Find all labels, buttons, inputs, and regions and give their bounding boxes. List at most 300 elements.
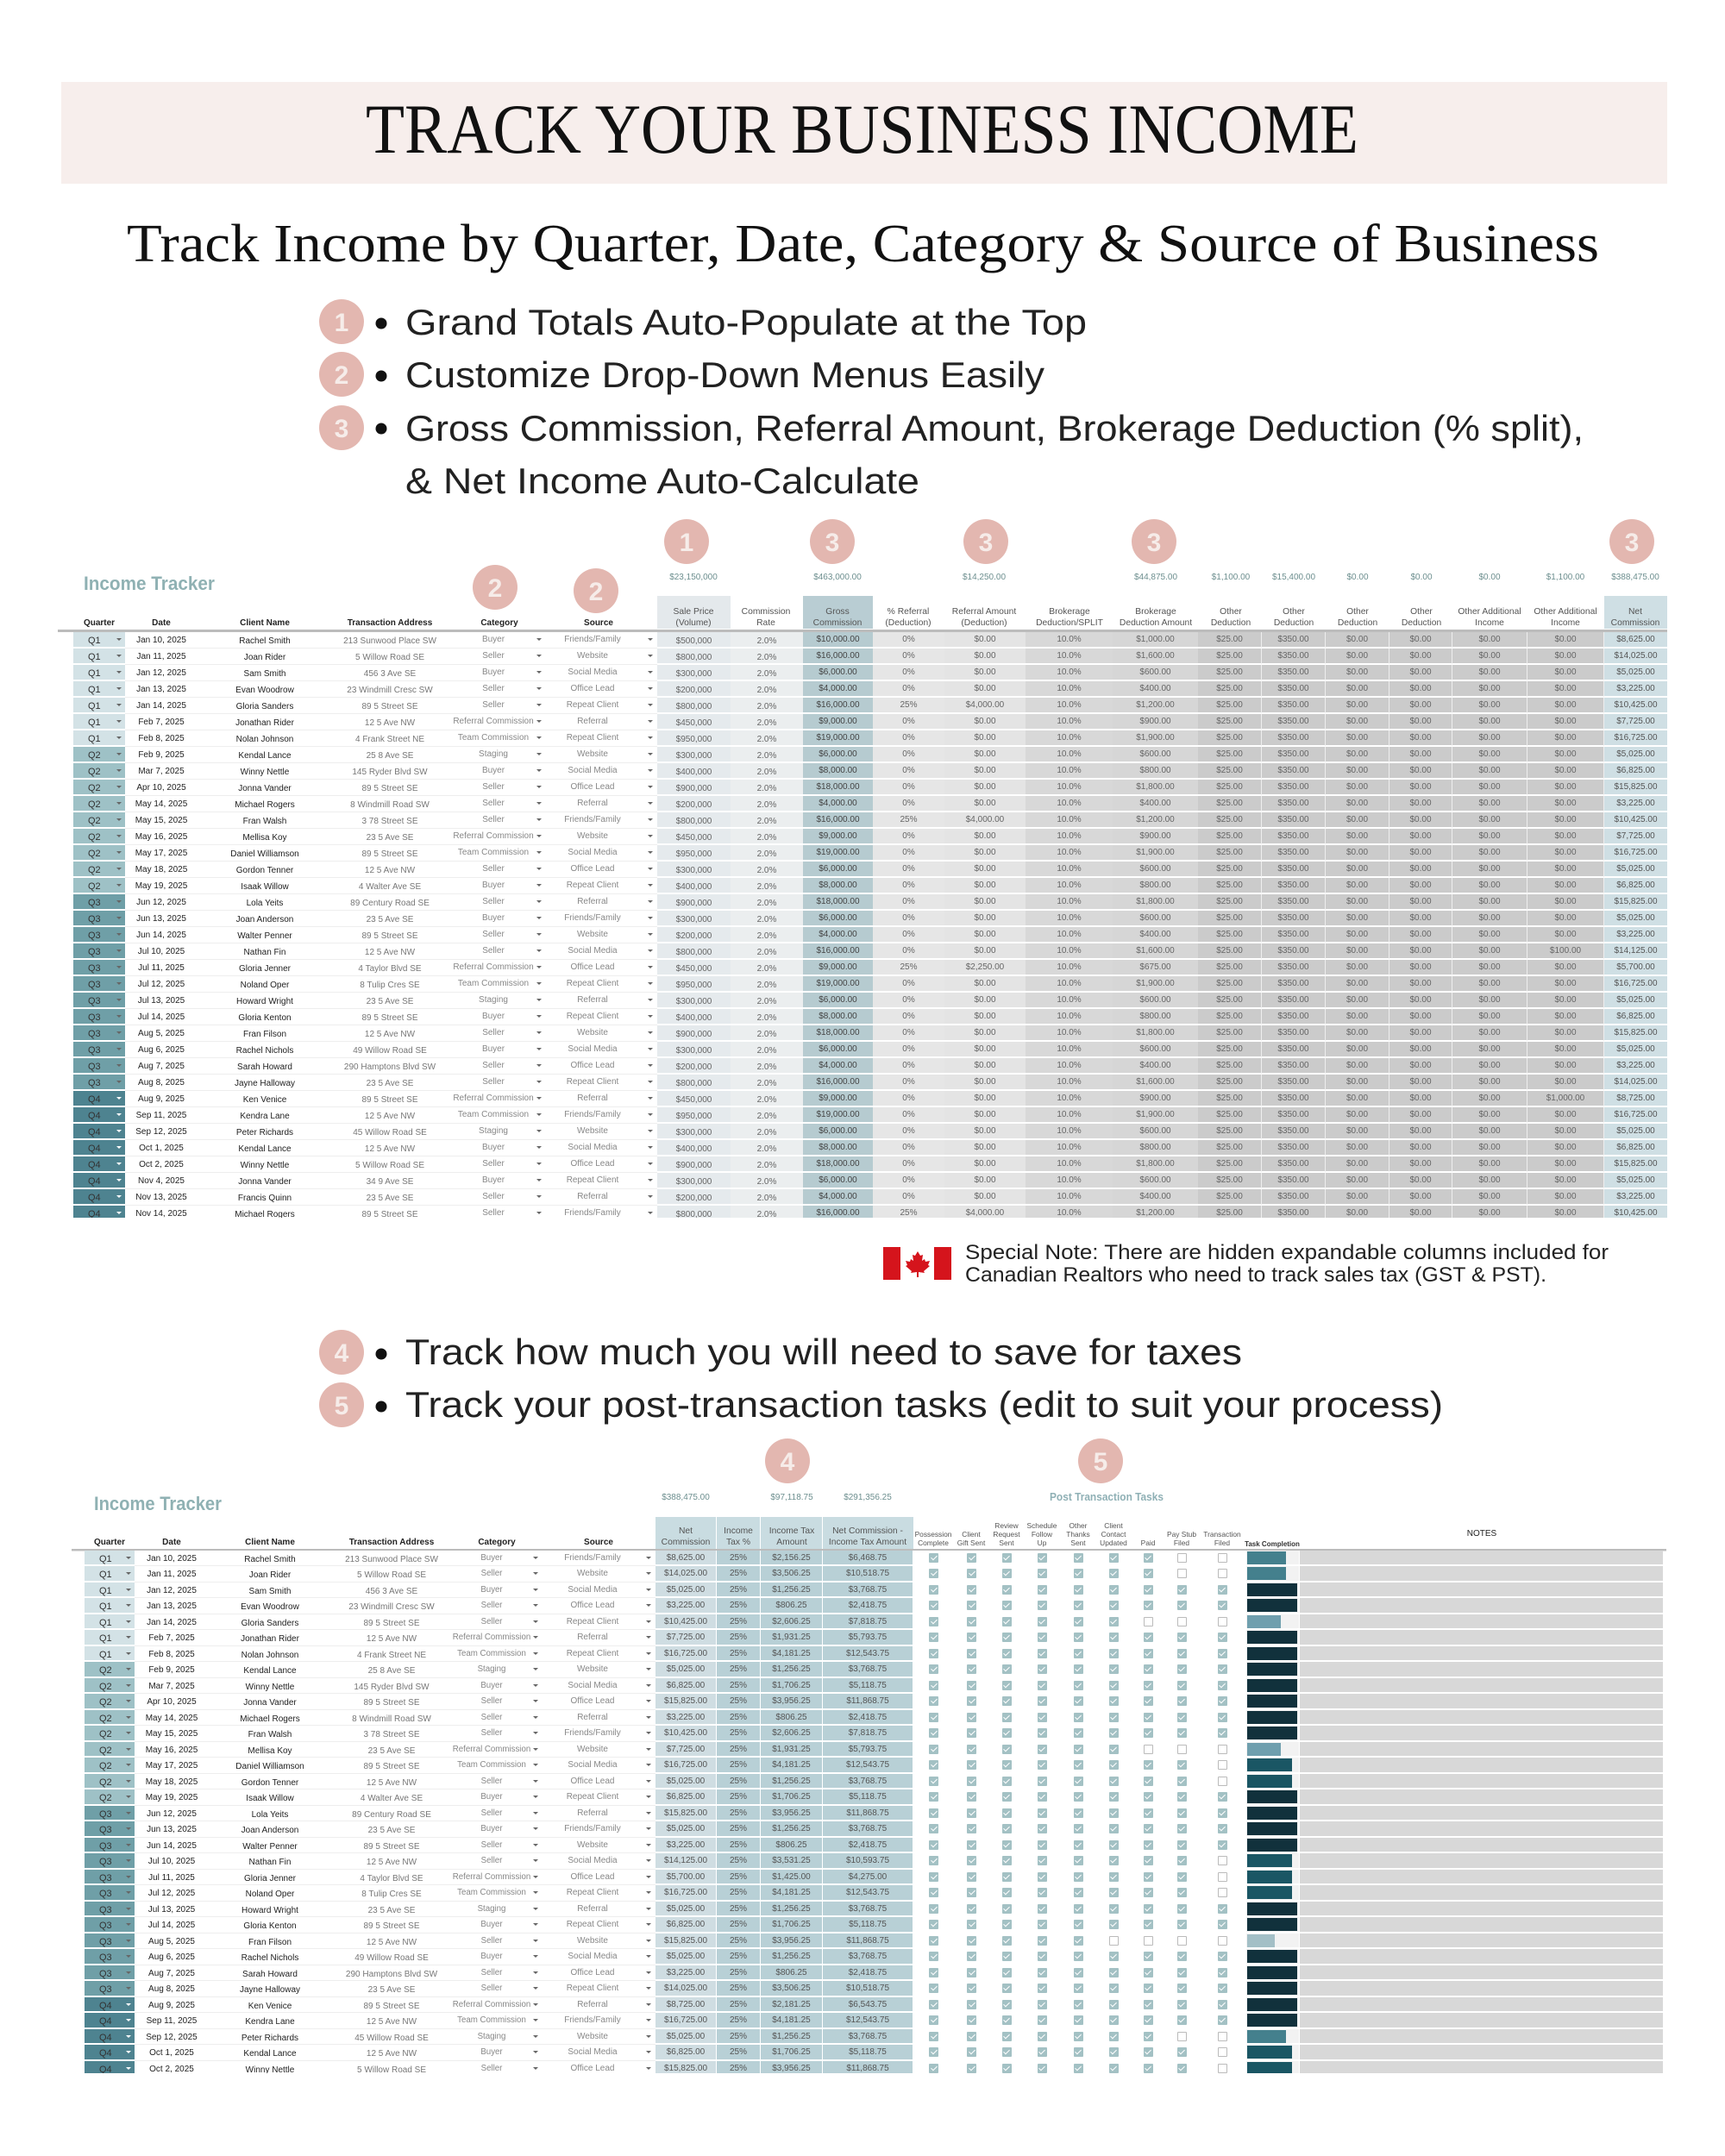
table 2: tax tracking and post-transaction tasks: Staging <box>478 1664 505 1674</box>
table 2: tax tracking and post-transaction tasks: $7,725.00 <box>667 1633 705 1642</box>
table 1: income tracker rows: $0.00 <box>1478 979 1501 988</box>
table 1: income tracker rows: $0.00 <box>974 749 996 759</box>
table 1: income tracker rows: $0.00 <box>1478 913 1501 923</box>
table 1: income tracker rows: 8 Windmill Road SW <box>350 800 430 810</box>
table 1: income tracker rows: Michael Rogers <box>235 800 295 810</box>
table 1: income tracker rows: 89 5 Street SE <box>361 1095 418 1105</box>
table 2: tax tracking and post-transaction tasks: May 16, 2025 <box>146 1745 198 1755</box>
table 2: tax tracking and post-transaction tasks: $7,818.75 <box>849 1728 887 1738</box>
bullet list: features 1 to 3: 1 <box>335 309 348 337</box>
table 1: income tracker rows: $0.00 <box>1346 815 1368 824</box>
table 1: income tracker rows: $0.00 <box>974 930 996 939</box>
table 1: income tracker rows: $0.00 <box>1554 733 1577 743</box>
table 1: income tracker rows: Buyer <box>482 1175 505 1185</box>
table 2: tax tracking and post-transaction tasks: Referral Commission <box>453 1745 530 1754</box>
table 2: tax tracking and post-transaction tasks: Office Lead <box>571 1696 614 1706</box>
table 1 number badges <box>473 519 1654 613</box>
table 1: income tracker rows: $350.00 <box>1277 766 1309 775</box>
table 1: income tracker rows: Q4 <box>88 1094 101 1105</box>
table 2: tax tracking and post-transaction tasks: $5,118.75 <box>849 1681 887 1690</box>
table 1: income tracker rows: $0.00 <box>1554 749 1577 759</box>
table 1: income tracker rows: 23 5 Ave SE <box>367 1079 413 1088</box>
table 1: income tracker rows: $25.00 <box>1216 766 1243 775</box>
table 1: income tracker rows: $0.00 <box>1346 831 1368 841</box>
table 1: income tracker rows: Q2 <box>88 881 101 892</box>
table 2: tax tracking and post-transaction tasks: $12,543.75 <box>846 1649 889 1658</box>
special note text: Special Note: There are hidden expandable columns included for <box>965 1241 1609 1264</box>
table 1: income tracker rows: $18,000.00 <box>816 897 860 906</box>
table 2: tax tracking and post-transaction tasks: $5,118.75 <box>849 1920 887 1929</box>
table 2: tax tracking and post-transaction tasks: $1,706.25 <box>772 2047 811 2057</box>
table 2: tax tracking and post-transaction tasks: 23 5 Ave SE <box>368 1906 415 1915</box>
table 1: income tracker rows <box>73 632 1667 1218</box>
table 2 column headers: Transaction Address <box>349 1538 435 1547</box>
table 2: tax tracking and post-transaction tasks: $15,825.00 <box>664 1696 707 1706</box>
table 1: income tracker rows: 2.0% <box>757 1128 776 1138</box>
table 2: tax tracking and post-transaction tasks: Q2 <box>99 1745 112 1756</box>
table 1: income tracker rows: Buyer <box>482 1012 505 1021</box>
table 2 column headers: Complete <box>918 1539 949 1547</box>
table 1: income tracker rows: Q3 <box>88 1062 101 1072</box>
table 1: income tracker rows: $4,000.00 <box>966 700 1004 710</box>
table 1: income tracker rows: Q4 <box>88 1127 101 1138</box>
table 1: income tracker rows: $950,000 <box>676 1112 712 1121</box>
table 1: income tracker rows: Q1 <box>88 734 101 744</box>
table 1: income tracker rows: $6,825.00 <box>1616 881 1655 890</box>
table 1: income tracker rows: $0.00 <box>1554 1126 1577 1136</box>
table 1: income tracker rows: $350.00 <box>1277 946 1309 956</box>
table 2: tax tracking and post-transaction tasks: Referral <box>577 1633 608 1642</box>
table 1: income tracker rows: 0% <box>902 930 915 939</box>
table 1: income tracker rows: 23 5 Ave SE <box>367 997 413 1006</box>
table 1: income tracker rows: 23 Windmill Cresc SW <box>347 686 433 695</box>
table 2: tax tracking and post-transaction tasks: 25% <box>730 1808 747 1818</box>
table 1: income tracker rows: Q1 <box>88 652 101 662</box>
table 1: income tracker rows: 0% <box>902 1094 915 1103</box>
table 1: income tracker rows: $16,725.00 <box>1614 1110 1658 1119</box>
post transaction tasks heading: Post Transaction Tasks <box>1050 1490 1164 1503</box>
table 2: tax tracking and post-transaction tasks: $10,425.00 <box>664 1728 707 1738</box>
table 1: income tracker rows: $1,200.00 <box>1136 815 1175 824</box>
table 1: income tracker rows: Social Media <box>568 946 618 956</box>
table 1: income tracker rows: $0.00 <box>1409 913 1432 923</box>
table 2: tax tracking and post-transaction tasks: 25% <box>730 1936 747 1946</box>
table 1: income tracker rows: $0.00 <box>1478 1192 1501 1201</box>
table 1: income tracker rows: $5,025.00 <box>1616 1044 1655 1054</box>
table 1: income tracker rows: $400,000 <box>676 1013 712 1023</box>
table 1: income tracker rows: 0% <box>902 1061 915 1070</box>
table 1: income tracker rows: Q3 <box>88 1029 101 1039</box>
table 1: income tracker rows: $25.00 <box>1216 995 1243 1005</box>
table 1: income tracker rows: Q2 <box>88 816 101 826</box>
table 1 grand totals: $15,400.00 <box>1272 573 1315 582</box>
table 1: income tracker rows: $1,600.00 <box>1136 946 1175 956</box>
table 1: income tracker rows: Seller <box>482 815 505 824</box>
table 2: tax tracking and post-transaction tasks: $8,725.00 <box>667 2000 705 2009</box>
table 1: income tracker rows: Seller <box>482 1061 505 1070</box>
table 2: tax tracking and post-transaction tasks: Social Media <box>568 1856 618 1865</box>
table 2: tax tracking and post-transaction tasks: 89 5 Street SE <box>363 1762 420 1771</box>
table 1: income tracker rows: Q2 <box>88 783 101 793</box>
table 1: income tracker rows: $25.00 <box>1216 1192 1243 1201</box>
table 2: tax tracking and post-transaction tasks: Buyer <box>480 1681 503 1690</box>
table 2: tax tracking and post-transaction tasks: Aug 5, 2025 <box>148 1937 195 1946</box>
table 1: income tracker rows: $0.00 <box>1409 1159 1432 1169</box>
table 1: income tracker rows: $0.00 <box>1554 766 1577 775</box>
table 2: tax tracking and post-transaction tasks: Website <box>577 1745 608 1754</box>
table 1 column headers: Other <box>1220 607 1242 617</box>
table 1: income tracker rows: 0% <box>902 881 915 890</box>
table 2 title: Income Tracker <box>94 1493 222 1514</box>
table 1: income tracker rows: $0.00 <box>974 733 996 743</box>
table 2: tax tracking and post-transaction tasks: Website <box>577 2032 608 2041</box>
table 1: income tracker rows: Nathan Fin <box>244 948 285 957</box>
table 1 column headers: Deduction <box>1402 618 1441 628</box>
table 1: income tracker rows: 12 5 Ave NW <box>365 1030 415 1039</box>
table 1: income tracker rows: Referral <box>577 1192 608 1201</box>
table 1: income tracker rows: $0.00 <box>1346 799 1368 808</box>
table 1: income tracker rows: 8 Tulip Cres SE <box>360 981 420 990</box>
table 1: income tracker rows: $0.00 <box>1346 1175 1368 1185</box>
table 1 column headers: Income <box>1551 618 1580 628</box>
table 2: tax tracking and post-transaction tasks: 25% <box>730 1968 747 1977</box>
table 2: tax tracking and post-transaction tasks: $5,025.00 <box>667 2032 705 2041</box>
table 1: income tracker rows: Buyer <box>482 1143 505 1152</box>
table 2: tax tracking and post-transaction tasks: $4,181.25 <box>772 1649 811 1658</box>
table 1: income tracker rows: 0% <box>902 1159 915 1169</box>
table 1: income tracker rows: 0% <box>902 848 915 857</box>
table 1: income tracker rows: $0.00 <box>1346 881 1368 890</box>
table 1: income tracker rows: $900,000 <box>676 899 712 908</box>
table 1: income tracker rows: Feb 7, 2025 <box>138 718 185 727</box>
table 1: income tracker rows: $0.00 <box>1478 1061 1501 1070</box>
table 2: tax tracking and post-transaction tasks: Feb 7, 2025 <box>148 1633 195 1643</box>
table 2: tax tracking and post-transaction tasks: Jonna Vander <box>243 1698 297 1708</box>
table 1: income tracker rows: 0% <box>902 684 915 693</box>
table 1: income tracker rows: $400,000 <box>676 768 712 777</box>
table 1: income tracker rows: $1,900.00 <box>1136 848 1175 857</box>
table 1: income tracker rows: $0.00 <box>1409 1110 1432 1119</box>
table 1: income tracker rows: $0.00 <box>1554 700 1577 710</box>
table 2 column headers <box>72 1517 1666 1551</box>
table 1: income tracker rows: $0.00 <box>974 1110 996 1119</box>
bullet list: features 1 to 3 <box>319 299 1584 501</box>
table 2: tax tracking and post-transaction tasks: Seller <box>481 1601 502 1610</box>
table 1: income tracker rows: 0% <box>902 766 915 775</box>
table 2: tax tracking and post-transaction tasks: Mar 7, 2025 <box>148 1682 195 1691</box>
table 1: income tracker rows: $0.00 <box>1346 749 1368 759</box>
table 1: income tracker rows: $0.00 <box>974 1012 996 1021</box>
table 1: income tracker rows: $19,000.00 <box>816 1110 860 1119</box>
table 2: tax tracking and post-transaction tasks: $3,768.75 <box>849 1824 887 1833</box>
table 2: tax tracking and post-transaction tasks: $3,768.75 <box>849 1777 887 1786</box>
table 1: income tracker rows: $25.00 <box>1216 1208 1243 1218</box>
table 1: income tracker rows: $350.00 <box>1277 749 1309 759</box>
table 2: tax tracking and post-transaction tasks: Repeat Client <box>567 1920 618 1929</box>
table 1 column headers: (Volume) <box>675 618 712 628</box>
table 1: income tracker rows: $350.00 <box>1277 995 1309 1005</box>
table 1: income tracker rows: $300,000 <box>676 669 712 679</box>
table 1: income tracker rows: 2.0% <box>757 997 776 1006</box>
table 2: tax tracking and post-transaction tasks: Jan 13, 2025 <box>147 1601 197 1611</box>
bullet list: features 1 to 3: Grand Totals Auto-Populate at the Top <box>405 302 1087 342</box>
table 1: income tracker rows: $0.00 <box>1554 1192 1577 1201</box>
table 1: income tracker rows: Apr 10, 2025 <box>136 783 186 793</box>
table 2: tax tracking and post-transaction tasks: Q1 <box>99 1570 112 1580</box>
table 1: income tracker rows: $25.00 <box>1216 700 1243 710</box>
table 1: income tracker rows: $6,000.00 <box>819 1126 857 1136</box>
table 1: income tracker rows: $1,800.00 <box>1136 782 1175 792</box>
table 1: income tracker rows: Q1 <box>88 636 101 646</box>
table 1: income tracker rows: $0.00 <box>1554 1028 1577 1037</box>
table 1: income tracker rows: $600.00 <box>1139 864 1171 874</box>
table 1: income tracker rows: Jun 12, 2025 <box>136 898 186 907</box>
table 1 column headers: Commission <box>813 618 862 628</box>
table 2: tax tracking and post-transaction tasks: 89 Century Road SE <box>352 1810 431 1820</box>
subtitle: Track Income by Quarter, Date, Category & Source of Business <box>127 215 1599 273</box>
table 1 column headers: Net <box>1628 607 1642 617</box>
table 2: tax tracking and post-transaction tasks: $6,543.75 <box>849 2000 887 2009</box>
table 2: tax tracking and post-transaction tasks: Friends/Family <box>564 2015 621 2025</box>
table 2: tax tracking and post-transaction tasks: $3,506.25 <box>772 1569 811 1578</box>
table 1: income tracker rows: Buyer <box>482 667 505 677</box>
table 1: income tracker rows: 2.0% <box>757 800 776 810</box>
table 2: tax tracking and post-transaction tasks: 25% <box>730 2064 747 2073</box>
table 2: tax tracking and post-transaction tasks: $16,725.00 <box>664 2015 707 2025</box>
table 2: tax tracking and post-transaction tasks: 25 8 Ave SE <box>368 1666 415 1676</box>
table 1: income tracker rows: Referral <box>577 897 608 906</box>
table 2: tax tracking and post-transaction tasks: Rachel Smith <box>244 1555 296 1564</box>
table 1: income tracker rows: $0.00 <box>1554 930 1577 939</box>
table 1: income tracker rows: $1,200.00 <box>1136 1208 1175 1218</box>
table 1: income tracker rows: Q4 <box>88 1111 101 1121</box>
table 1: income tracker rows: 10.0% <box>1057 881 1082 890</box>
table 2: tax tracking and post-transaction tasks: $14,125.00 <box>664 1856 707 1865</box>
table 1: income tracker rows: 456 3 Ave SE <box>364 669 416 679</box>
table 1: income tracker rows: Seller <box>482 864 505 874</box>
table 1: income tracker rows: $9,000.00 <box>819 962 857 972</box>
table 1: income tracker rows: $0.00 <box>1409 667 1432 677</box>
table 2: tax tracking and post-transaction tasks: $3,225.00 <box>667 1840 705 1850</box>
table 1: income tracker rows: $200,000 <box>676 1194 712 1203</box>
table 1: income tracker rows: $0.00 <box>974 946 996 956</box>
table 1: income tracker rows: Evan Woodrow <box>235 686 294 695</box>
table 1: income tracker rows: $350.00 <box>1277 881 1309 890</box>
table 2: tax tracking and post-transaction tasks: Seller <box>481 2064 502 2073</box>
table 2: tax tracking and post-transaction tasks: Website <box>577 1936 608 1946</box>
table 1: income tracker rows: $5,025.00 <box>1616 749 1655 759</box>
table 1: income tracker rows: Website <box>577 651 608 661</box>
table 1: income tracker rows: Referral Commission <box>453 1094 534 1103</box>
table 2: tax tracking and post-transaction tasks: 25% <box>730 1952 747 1961</box>
table 2: tax tracking and post-transaction tasks: Q4 <box>99 2001 112 2011</box>
table 1 column headers: Other <box>1283 607 1305 617</box>
table 1: income tracker rows: $0.00 <box>1478 684 1501 693</box>
bullet list: features 4 and 5: Track how much you will need to save for taxes <box>405 1332 1242 1372</box>
table 1: income tracker rows: $0.00 <box>1409 897 1432 906</box>
table 1: income tracker rows: 25% <box>900 700 918 710</box>
table 1: income tracker rows: $10,425.00 <box>1614 815 1658 824</box>
table 2: tax tracking and post-transaction tasks: May 19, 2025 <box>146 1793 198 1802</box>
table 1: income tracker rows: $0.00 <box>1346 864 1368 874</box>
table 1: income tracker rows: Seller <box>482 897 505 906</box>
table 2: tax tracking and post-transaction tasks: $14,025.00 <box>664 1984 707 1993</box>
table 1: income tracker rows: $4,000.00 <box>819 799 857 808</box>
table 2: tax tracking and post-transaction tasks: Sep 12, 2025 <box>146 2033 198 2042</box>
table 2: tax tracking and post-transaction tasks: $1,256.25 <box>772 1904 811 1914</box>
table 1: income tracker rows: Aug 9, 2025 <box>138 1094 185 1104</box>
table 1: income tracker rows: $0.00 <box>1478 1143 1501 1152</box>
bullet list: features 4 and 5 <box>319 1330 1443 1427</box>
bullet list: features 1 to 3: & Net Income Auto-Calculate <box>405 461 919 501</box>
table 2: tax tracking and post-transaction tasks: Q3 <box>99 1809 112 1820</box>
table 2: tax tracking and post-transaction tasks: $4,181.25 <box>772 1888 811 1897</box>
title band <box>61 82 1667 184</box>
table 1: income tracker rows: $0.00 <box>1346 1143 1368 1152</box>
table 1: income tracker rows: $0.00 <box>1346 913 1368 923</box>
table 1: income tracker rows: $600.00 <box>1139 995 1171 1005</box>
table 2: tax tracking and post-transaction tasks: 25% <box>730 1601 747 1610</box>
table 1: income tracker rows: $19,000.00 <box>816 979 860 988</box>
table 2: tax tracking and post-transaction tasks: 23 5 Ave SE <box>368 1826 415 1835</box>
table 2: tax tracking and post-transaction tasks: Gloria Sanders <box>242 1619 298 1628</box>
table 2: tax tracking and post-transaction tasks: 25% <box>730 2032 747 2041</box>
table 2 column headers: Sent <box>999 1539 1014 1547</box>
table 1: income tracker rows: Q3 <box>88 947 101 957</box>
table 1: income tracker rows: $300,000 <box>676 915 712 924</box>
table 1: income tracker rows: Isaak Willow <box>241 882 289 892</box>
table 2: tax tracking and post-transaction tasks: Referral <box>577 1904 608 1914</box>
table 1: income tracker rows: $0.00 <box>1346 684 1368 693</box>
table 1: income tracker rows: 0% <box>902 1126 915 1136</box>
table 2: tax tracking and post-transaction tasks: $7,818.75 <box>849 1617 887 1626</box>
table 2: tax tracking and post-transaction tasks: $1,706.25 <box>772 1920 811 1929</box>
table 2 column headers: Up <box>1038 1539 1047 1547</box>
table 2: tax tracking and post-transaction tasks: 456 3 Ave SE <box>366 1587 417 1596</box>
table 1: income tracker rows: $8,625.00 <box>1616 635 1655 644</box>
table 1: income tracker rows: $0.00 <box>1478 799 1501 808</box>
table 1: income tracker rows: 12 5 Ave NW <box>365 718 415 728</box>
table 1: income tracker rows: $0.00 <box>1478 1208 1501 1218</box>
table 1: income tracker rows: $25.00 <box>1216 1126 1243 1136</box>
table 1: income tracker rows: Walter Penner <box>237 931 292 941</box>
table 1 column headers: Other <box>1346 607 1369 617</box>
table 1: income tracker rows: $0.00 <box>1346 782 1368 792</box>
table 1: income tracker rows: $450,000 <box>676 1095 712 1105</box>
table 2 column headers: Gift Sent <box>957 1539 986 1547</box>
table 2: tax tracking and post-transaction tasks: Q3 <box>99 1969 112 1979</box>
table 1: income tracker rows: 10.0% <box>1057 864 1082 874</box>
table 1: income tracker rows: Referral Commission <box>453 717 534 726</box>
table 1: income tracker rows: Gloria Sanders <box>236 702 293 711</box>
table 1: income tracker rows: Q3 <box>88 996 101 1006</box>
table 1: income tracker rows: $25.00 <box>1216 717 1243 726</box>
table 1: income tracker rows: 0% <box>902 1110 915 1119</box>
table 1: income tracker rows: $350.00 <box>1277 799 1309 808</box>
table 1: income tracker rows: 4 Taylor Blvd SE <box>358 964 422 974</box>
table 1: income tracker rows: $0.00 <box>1554 717 1577 726</box>
table 1: income tracker rows: Seller <box>482 700 505 710</box>
table 1 column headers: Gross <box>825 607 850 617</box>
table 2: tax tracking and post-transaction tasks: Feb 9, 2025 <box>148 1665 195 1675</box>
table 1: income tracker rows: Q3 <box>88 980 101 990</box>
table 1: income tracker rows: $900.00 <box>1139 717 1171 726</box>
table 1: income tracker rows: Social Media <box>568 766 618 775</box>
table 1: income tracker rows: Staging <box>479 995 508 1005</box>
table 2: tax tracking and post-transaction tasks: 4 Walter Ave SE <box>361 1794 423 1803</box>
table 2: tax tracking and post-transaction tasks: Jul 14, 2025 <box>148 1921 195 1930</box>
table 1: income tracker rows: 34 9 Ave SE <box>367 1177 413 1187</box>
table 1: income tracker rows: $0.00 <box>1409 962 1432 972</box>
table 2: tax tracking and post-transaction tasks: Referral <box>577 1713 608 1722</box>
table 1: income tracker rows: $800.00 <box>1139 1143 1171 1152</box>
table 2 column headers: Paid <box>1141 1539 1156 1547</box>
table 2: tax tracking and post-transaction tasks: Rachel Nichols <box>242 1953 298 1963</box>
table 1: income tracker rows: $0.00 <box>1554 635 1577 644</box>
table 1: income tracker rows: $0.00 <box>1554 995 1577 1005</box>
table 1 grand totals <box>669 573 1659 582</box>
table 2: tax tracking and post-transaction tasks: $16,725.00 <box>664 1760 707 1770</box>
table 2: tax tracking and post-transaction tasks: Buyer <box>480 1585 503 1595</box>
table 2: tax tracking and post-transaction tasks: $11,868.75 <box>846 1808 889 1818</box>
table 1: income tracker rows: $5,025.00 <box>1616 1126 1655 1136</box>
table 1: income tracker rows: $1,800.00 <box>1136 1028 1175 1037</box>
table 2 number badges: 4 <box>781 1448 795 1476</box>
table 1: income tracker rows: 2.0% <box>757 735 776 744</box>
table 1: income tracker rows: $4,000.00 <box>966 1208 1004 1218</box>
table 2: tax tracking and post-transaction tasks: Repeat Client <box>567 1984 618 1993</box>
table 2: tax tracking and post-transaction tasks: 25% <box>730 1904 747 1914</box>
table 1: income tracker rows: 25 8 Ave SE <box>367 751 413 761</box>
table 1: income tracker rows: 3 78 Street SE <box>361 817 418 826</box>
table 1: income tracker rows: Q3 <box>88 1045 101 1056</box>
table 1: income tracker rows: $0.00 <box>974 782 996 792</box>
table 1: income tracker rows: $0.00 <box>974 1028 996 1037</box>
table 1: income tracker rows: 2.0% <box>757 653 776 662</box>
table 1 column headers: Client Name <box>240 618 290 628</box>
table 1: income tracker rows: $0.00 <box>1554 1208 1577 1218</box>
table 1 grand totals: $23,150,000 <box>669 573 718 582</box>
table 1: income tracker rows: Referral Commission <box>453 962 534 972</box>
table 1: income tracker rows: $3,225.00 <box>1616 799 1655 808</box>
table 1: income tracker rows: $0.00 <box>1554 1159 1577 1169</box>
table 1: income tracker rows: 0% <box>902 799 915 808</box>
table 1: income tracker rows: 2.0% <box>757 1177 776 1187</box>
table 1 grand totals: $463,000.00 <box>813 573 862 582</box>
table 1: income tracker rows: Staging <box>479 749 508 759</box>
table 2: tax tracking and post-transaction tasks: $5,118.75 <box>849 1792 887 1802</box>
table 2: tax tracking and post-transaction tasks: $2,418.75 <box>849 1713 887 1722</box>
table 1 column headers: Source <box>584 618 613 628</box>
table 1: income tracker rows: 89 5 Street SE <box>361 931 418 941</box>
table 1: income tracker rows: $0.00 <box>1478 946 1501 956</box>
table 1: income tracker rows: Jan 12, 2025 <box>136 668 186 678</box>
table 2: tax tracking and post-transaction tasks: $1,256.25 <box>772 1777 811 1786</box>
table 2 column headers: Follow <box>1032 1530 1053 1539</box>
table 2: tax tracking and post-transaction tasks: Aug 7, 2025 <box>148 1969 195 1978</box>
table 2: tax tracking and post-transaction tasks: 23 Windmill Cresc SW <box>348 1602 435 1612</box>
table 1: income tracker rows: Jul 10, 2025 <box>138 947 185 956</box>
table 1: income tracker rows: 0% <box>902 667 915 677</box>
table 2: tax tracking and post-transaction tasks: Website <box>577 1569 608 1578</box>
table 2: tax tracking and post-transaction tasks: $11,868.75 <box>846 1696 889 1706</box>
table 1: income tracker rows: 89 5 Street SE <box>361 1013 418 1023</box>
table 2: tax tracking and post-transaction tasks: Gloria Jenner <box>244 1874 296 1883</box>
table 1: income tracker rows: $0.00 <box>1554 684 1577 693</box>
table 1: income tracker rows: $0.00 <box>1346 930 1368 939</box>
table 2: tax tracking and post-transaction tasks: Q3 <box>99 1873 112 1883</box>
table 2: tax tracking and post-transaction tasks: $2,156.25 <box>772 1553 811 1563</box>
